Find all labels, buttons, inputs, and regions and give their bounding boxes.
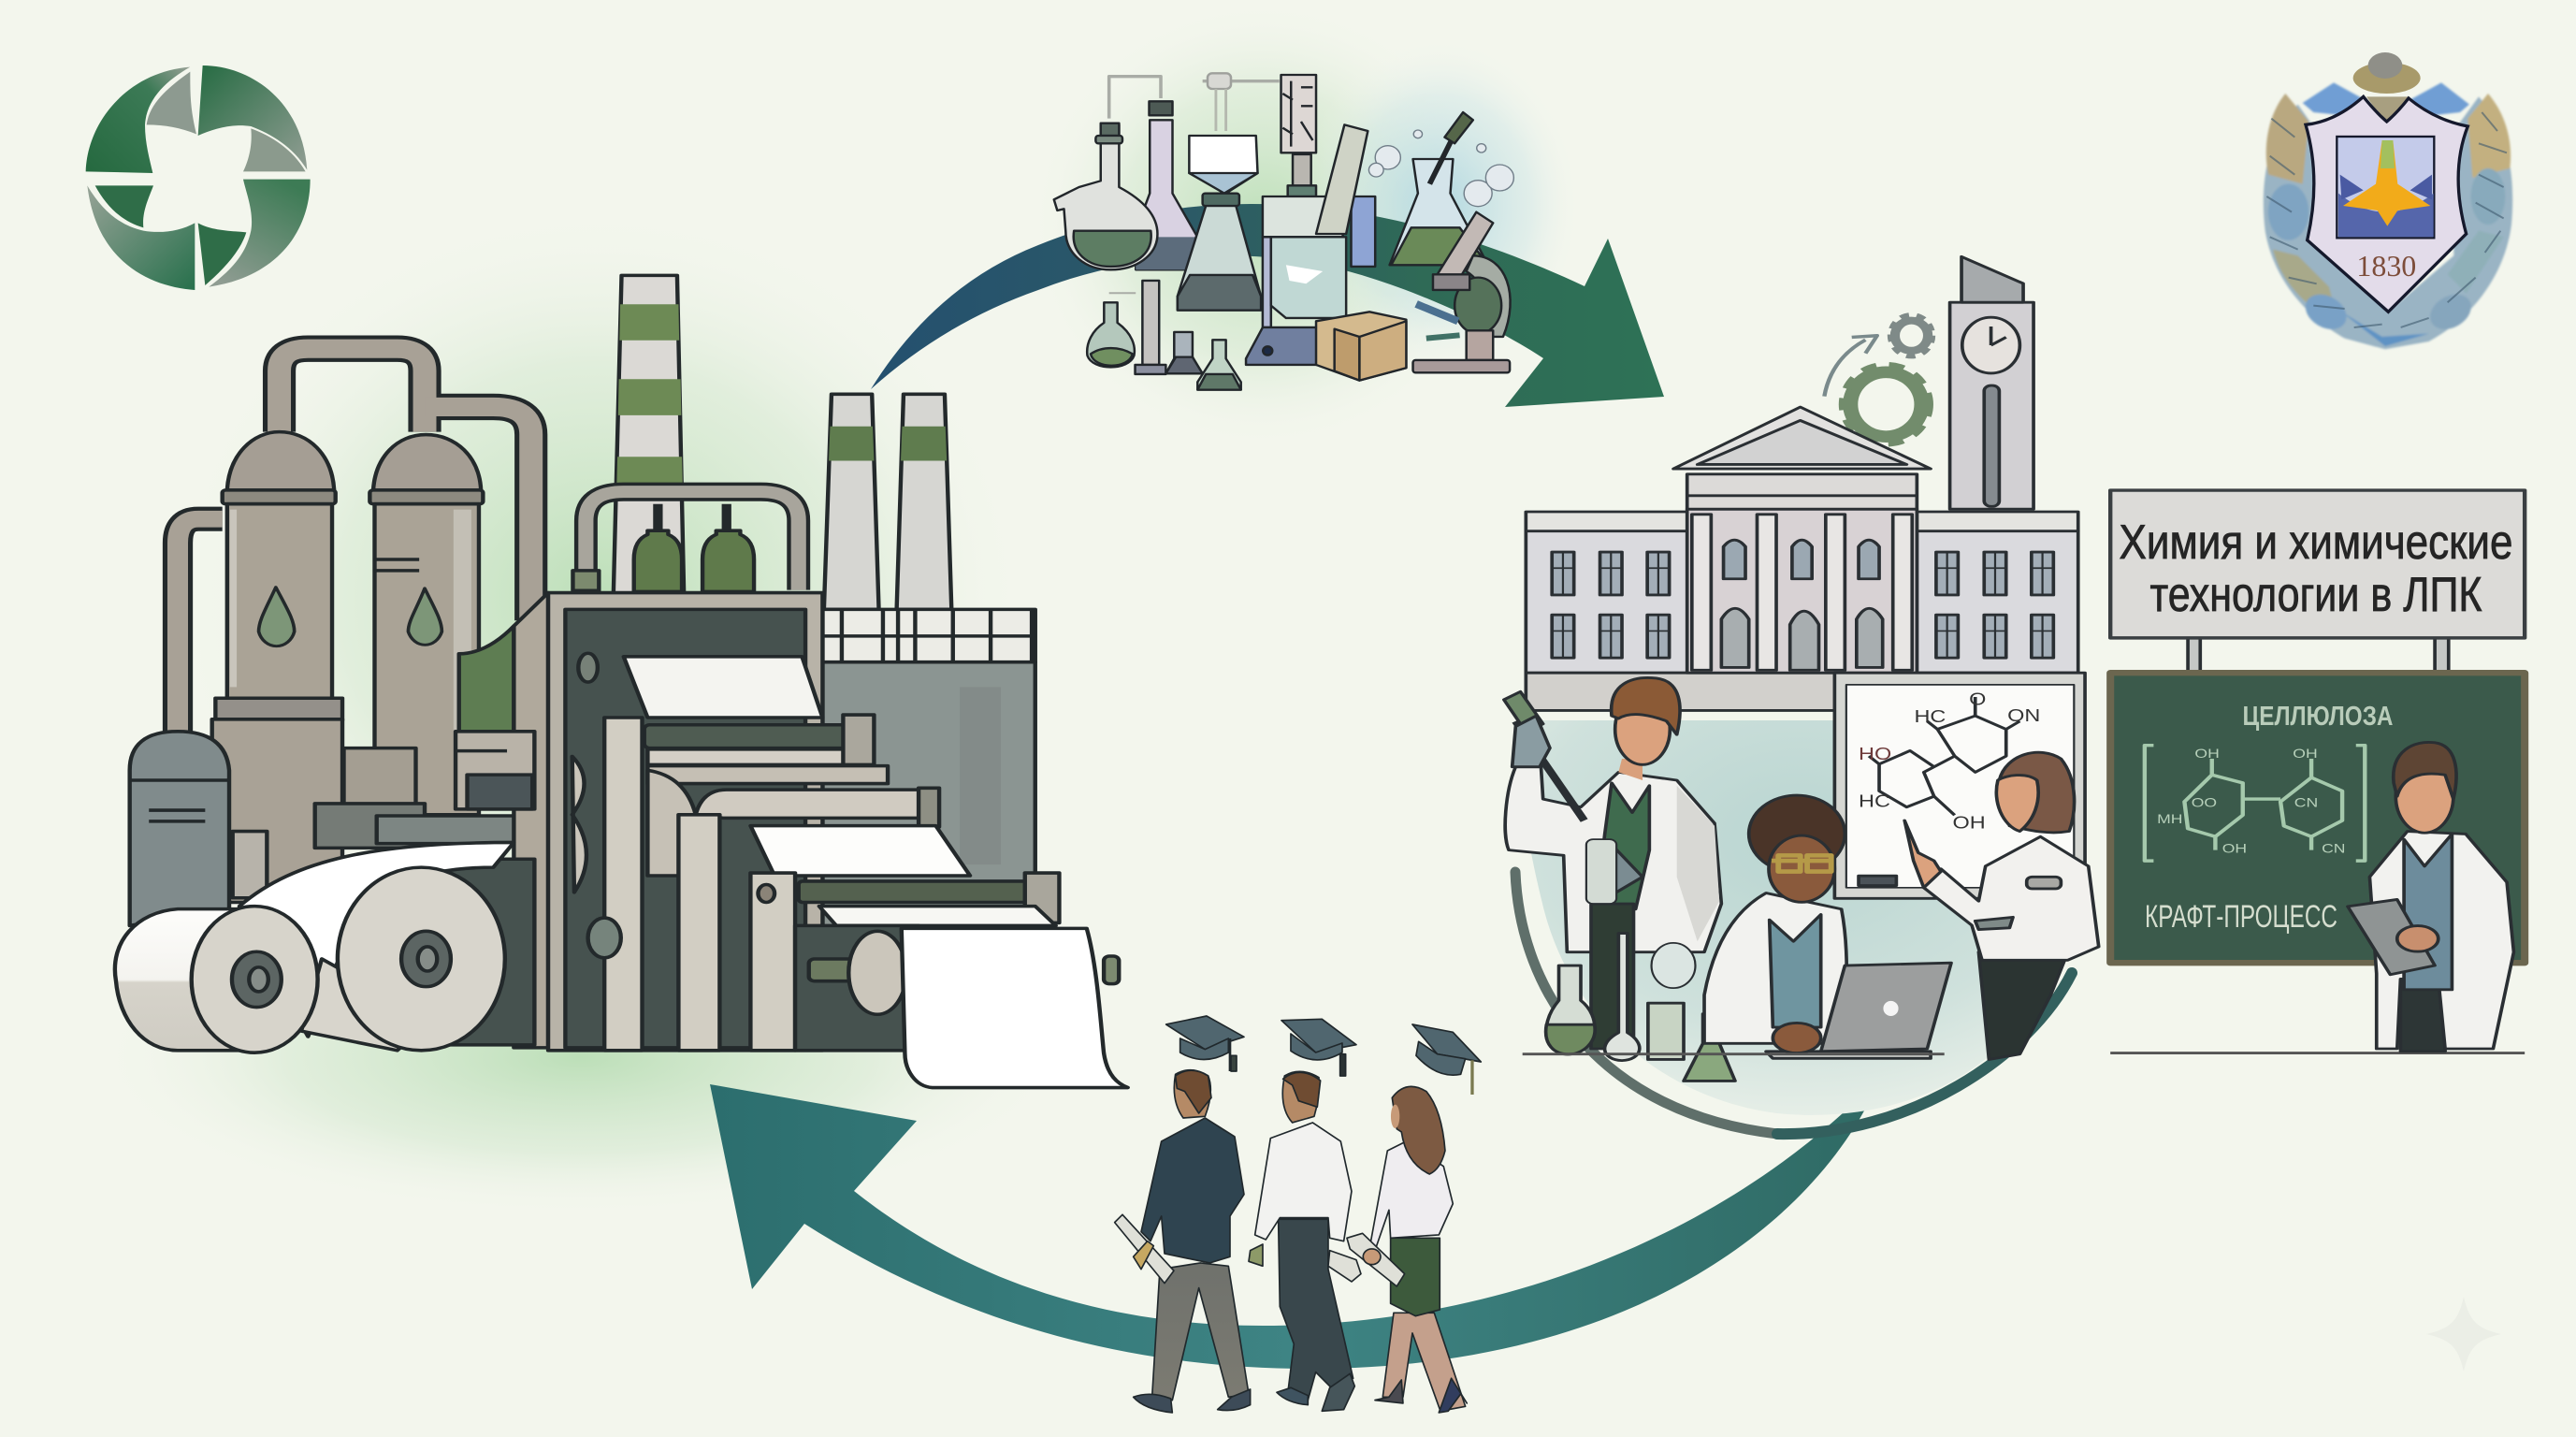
arrow: graduates back to industry [710,1076,1881,1369]
whiteboard: HO [1859,745,1891,764]
arrow: industry to science [871,204,1664,407]
graduate two [1249,1071,1361,1411]
twin chimneys [824,394,951,609]
main chimney [614,275,684,599]
molecule diagram [1869,697,2019,815]
wing windows [1552,552,2053,658]
laptop [1821,963,1951,1052]
whiteboard: OH [1953,814,1986,833]
distillation tube [1109,77,1161,119]
paper sheet middle [750,826,970,876]
blue clamp block [1352,196,1375,267]
laboratory backdrop disc [1521,720,2077,1115]
watermark sparkle [2426,1297,2501,1372]
grey rear building [822,609,1035,928]
small blocks [315,748,528,848]
floor line board [2110,1051,2525,1055]
chalkboard: OH [2194,748,2220,761]
scientist at chalkboard [2348,742,2513,1052]
whiteboard: ON [2007,706,2040,725]
chalkboard: OO [2192,796,2217,810]
gears [1844,315,1932,443]
green tank panel and strut [456,593,548,1048]
main press frame [548,593,1059,1051]
big paper rolls [115,842,534,1052]
output paper roll [795,925,1128,1088]
graduates [1115,1016,1481,1413]
chalkboard title: ЦЕЛЛЮЛОЗА [2243,702,2394,732]
background glow: laboratory equipment [1029,0,1581,449]
chalkboard [2110,673,2525,963]
drop icon right [408,588,441,645]
main building wings [1526,512,2078,710]
top pipes and bottles [572,492,799,591]
chalkboard: OH [2222,842,2247,856]
whiteboard [1834,673,2085,898]
grey tank [130,732,267,925]
laboratory equipment cluster [1054,73,1513,390]
university and laboratory scene [1504,256,2525,1081]
chalkboard: OH [2293,748,2318,761]
sign text: Химия и химические [2120,515,2512,570]
scientist at whiteboard [1904,752,2099,1059]
column left [212,432,342,902]
info sign [2110,490,2525,674]
microscope [1413,212,1511,372]
overhead pipes [178,349,531,737]
eagle crown [2353,52,2421,124]
test tube [1316,124,1368,234]
round flask [1054,123,1157,269]
column right [369,435,483,815]
condenser [1281,75,1316,196]
paper sheet upper [624,657,822,718]
whiteboard: HC [1914,707,1946,726]
graduate one [1115,1070,1251,1413]
inner emblem [2337,137,2434,238]
whiteboard: O [1969,690,1986,709]
clipboard [2348,899,2435,975]
background glow: factory [94,206,1066,1216]
chalkboard: CN [2322,842,2346,856]
diploma [1115,1214,1174,1284]
graduation caps [1166,1016,1481,1095]
molecules [1368,130,1513,207]
sign text: технологии в ЛПК [2149,568,2482,622]
right conical flask [1390,112,1488,265]
cardboard box [1316,312,1406,381]
clock tower [1950,256,2033,509]
year: 1830 [2356,249,2416,283]
wreath [2264,82,2512,349]
drop icon left [259,588,295,646]
ring around laboratory [1515,872,2072,1134]
emblem: university crest 1830 [2264,52,2512,349]
whiteboard: HC [1859,792,1890,811]
tall flask [1136,101,1199,269]
sign text [2120,515,2512,622]
floor line lab [1523,1052,1945,1056]
wreath leaf lines [2266,112,2507,327]
chalkboard caption: КРАФТ-ПРОЦЕСС [2145,899,2337,935]
seated researcher with laptop [1704,795,1951,1058]
chalkboard: MH [2157,813,2182,826]
small glassware row [1087,281,1241,390]
chalkboard: CN [2294,796,2318,810]
scientist with pipette [1504,677,1721,1049]
portico [1673,407,1931,673]
graduate three [1347,1086,1467,1413]
small arrow [1824,336,1877,397]
shield [2306,96,2467,312]
beaker and stand [1246,196,1346,365]
logo: green pinwheel [86,65,311,290]
bench glassware [1546,934,1735,1081]
diploma [1347,1233,1405,1286]
funnel and flask [1178,73,1280,311]
factory: pulp and paper mill [115,275,1128,1088]
